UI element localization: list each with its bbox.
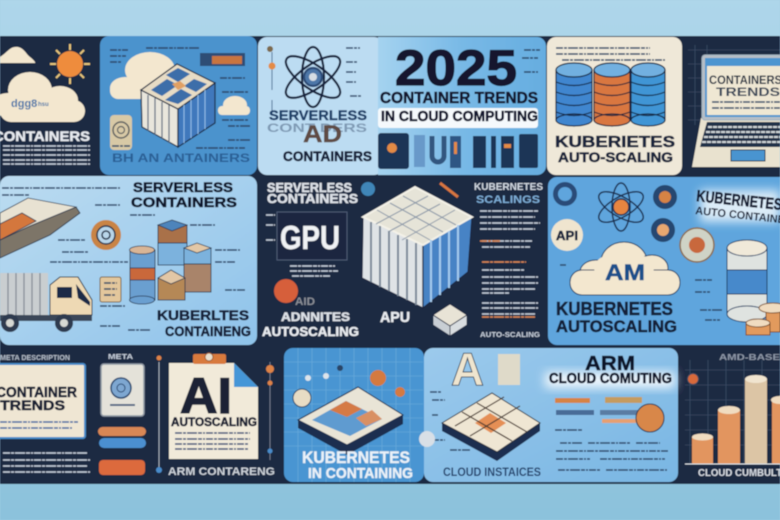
glow behind heading (700, 190, 780, 222)
icon: badge (293, 389, 311, 407)
document: AI (180, 368, 232, 424)
bar chart (692, 375, 780, 464)
icon: atom (594, 183, 648, 231)
text: trends: TRENDS (716, 87, 780, 99)
panel: container and cloud (100, 36, 257, 175)
card: container trends (0, 364, 85, 438)
timeline left (156, 356, 162, 473)
icon: large cylinder (727, 240, 767, 322)
panel: ARM cloud computing (419, 343, 678, 482)
caption lines (712, 102, 780, 108)
icon: orange hex (688, 374, 698, 384)
icon: sun (50, 44, 90, 84)
caption lines (3, 146, 90, 164)
caption lines (266, 215, 338, 276)
icon: large cloud: dgg8 (11, 98, 37, 110)
icon: large cloud (0, 72, 85, 122)
heading: containers: CONTAINERS (283, 148, 372, 164)
icon: atom (280, 47, 346, 107)
heading: serverless: SERVERLESS (269, 108, 367, 123)
panel: laptop (688, 45, 780, 167)
chart: stacked cylinders and cubes (130, 220, 211, 304)
heading: kubernetes: KUBERNETES (556, 299, 673, 319)
icon: shipping container (141, 64, 215, 147)
panel: kubernetes autoscaling cloud (548, 177, 780, 345)
heading: AD: AD (303, 121, 342, 148)
label: cloud instances: CLOUD INSTAICES (443, 467, 541, 479)
icon: cloud: AM (605, 260, 645, 285)
heading: autoscaling: AUTOSCALING (556, 317, 677, 336)
heading: serverless: SERVERLESS (133, 179, 233, 195)
heading: kubernetes: KUBERIETES (555, 134, 675, 151)
panel: bar chart (685, 352, 780, 479)
panel: meta description (0, 352, 275, 478)
icon: tag (100, 277, 121, 302)
label: containers: BH AN ANTAINERS (112, 151, 250, 165)
heading: ARM: ARM (585, 353, 635, 375)
icon: orange badge (274, 279, 298, 303)
icon: cloud (570, 242, 680, 295)
card: emblem (101, 364, 144, 416)
heading: kuberltes: KUBERLTES (157, 307, 249, 323)
icons: tiles (378, 133, 538, 169)
title: container trends: CONTAINER TRENDS (380, 90, 538, 107)
grid (688, 45, 780, 125)
small labels (110, 48, 250, 148)
scattered labels (2, 188, 245, 330)
body lines (3, 453, 90, 472)
icon: small box (433, 304, 467, 336)
heading: scalings: SCALINGS (476, 194, 540, 206)
icon: atom badge (91, 220, 121, 250)
heading: containers: CONTAINERS (267, 192, 358, 206)
icon: orange tool (440, 183, 458, 197)
icon: network badges (553, 182, 677, 242)
icon: eye badge (680, 228, 714, 262)
heading: containers: CONTAINERS (131, 194, 237, 210)
label: AID: AID (295, 296, 315, 308)
title: 2025: 2025 (395, 40, 517, 96)
icon: blue badge (361, 182, 375, 196)
label: auto-scaling: AUTO-SCALING (480, 330, 540, 339)
small icons (305, 365, 405, 397)
icon: cloud behind container (110, 52, 175, 99)
timeline right (266, 362, 274, 460)
card: container trends: TRENDS (0, 397, 65, 413)
heading: auto-scaling: AUTO-SCALING (558, 149, 673, 165)
grid (284, 348, 423, 482)
baseline (685, 463, 780, 465)
icon: small cylinders (746, 303, 780, 335)
label: adnnites: ADNNITES (281, 310, 350, 324)
data rows (555, 397, 647, 423)
heading: kubernetes: KUBERNETES (474, 181, 543, 193)
icon: API circle: API (556, 228, 578, 243)
panel: serverless containers logistics (0, 176, 257, 345)
heading: containeng: CONTAINENG (165, 323, 251, 339)
side icons (267, 46, 362, 115)
panel: serverless containers (258, 37, 383, 175)
heading: serverless: SERVERLESS (267, 181, 352, 195)
label: arm containeng: ARM CONTARENG (168, 466, 275, 478)
icon: small cloud (218, 96, 250, 115)
icon: top container (0, 198, 80, 258)
icon: small cloud (0, 47, 35, 63)
small icons (560, 265, 722, 320)
panel: kubernetes auto-scaling (547, 37, 682, 175)
small icons (522, 50, 540, 72)
panel: main title (378, 37, 546, 175)
glow behind heading (545, 372, 675, 388)
data lines (555, 430, 668, 470)
faded word: containers: CONT DERS (267, 121, 367, 135)
icon: large cloud: hsu (38, 102, 49, 108)
badge: orange (636, 404, 664, 432)
body lines (480, 211, 540, 314)
chart: blue cylinder (631, 63, 665, 126)
chart: orange cylinder (594, 63, 630, 126)
chart: blue cylinder (556, 63, 592, 126)
white text glow (378, 108, 538, 128)
icon: spiral badge (110, 115, 132, 150)
grid (685, 360, 780, 464)
small icons row (556, 48, 665, 60)
label: meta: META (108, 352, 134, 361)
label: meta description: META DESCRIPTION (0, 355, 70, 362)
document (169, 353, 258, 459)
icon: API circle (551, 219, 583, 251)
panel: kubernetes in containing (284, 348, 424, 482)
left labels and lines (430, 392, 470, 450)
title: in cloud computing: IN CLOUD COMPUTING (381, 108, 538, 125)
heading: A: A (451, 343, 484, 395)
panel: GPU container (262, 181, 543, 339)
GPU box: GPU (280, 219, 340, 256)
faded block (498, 354, 520, 385)
document: AUTOSCALING (171, 417, 257, 429)
label: autoscaling: AUTOSCALING (262, 325, 359, 339)
pills (98, 427, 146, 475)
icon: chip (442, 393, 540, 461)
panel: clouds and containers heading (0, 44, 90, 164)
heading: kubernetes: KUBERNETES (302, 448, 410, 467)
orange labels (480, 241, 535, 317)
heading: in containing: IN CONTAINING (308, 465, 413, 482)
icon: large container (362, 187, 472, 308)
label: APU: APU (380, 309, 410, 326)
heading: cloud computing: CLOUD COMUTING (549, 371, 672, 387)
badge (419, 431, 435, 447)
icon: truck (0, 273, 92, 332)
icon: laptop (692, 55, 780, 167)
icon: tablet (298, 387, 403, 455)
label: AMD-based: AMD-BASE (719, 352, 780, 362)
